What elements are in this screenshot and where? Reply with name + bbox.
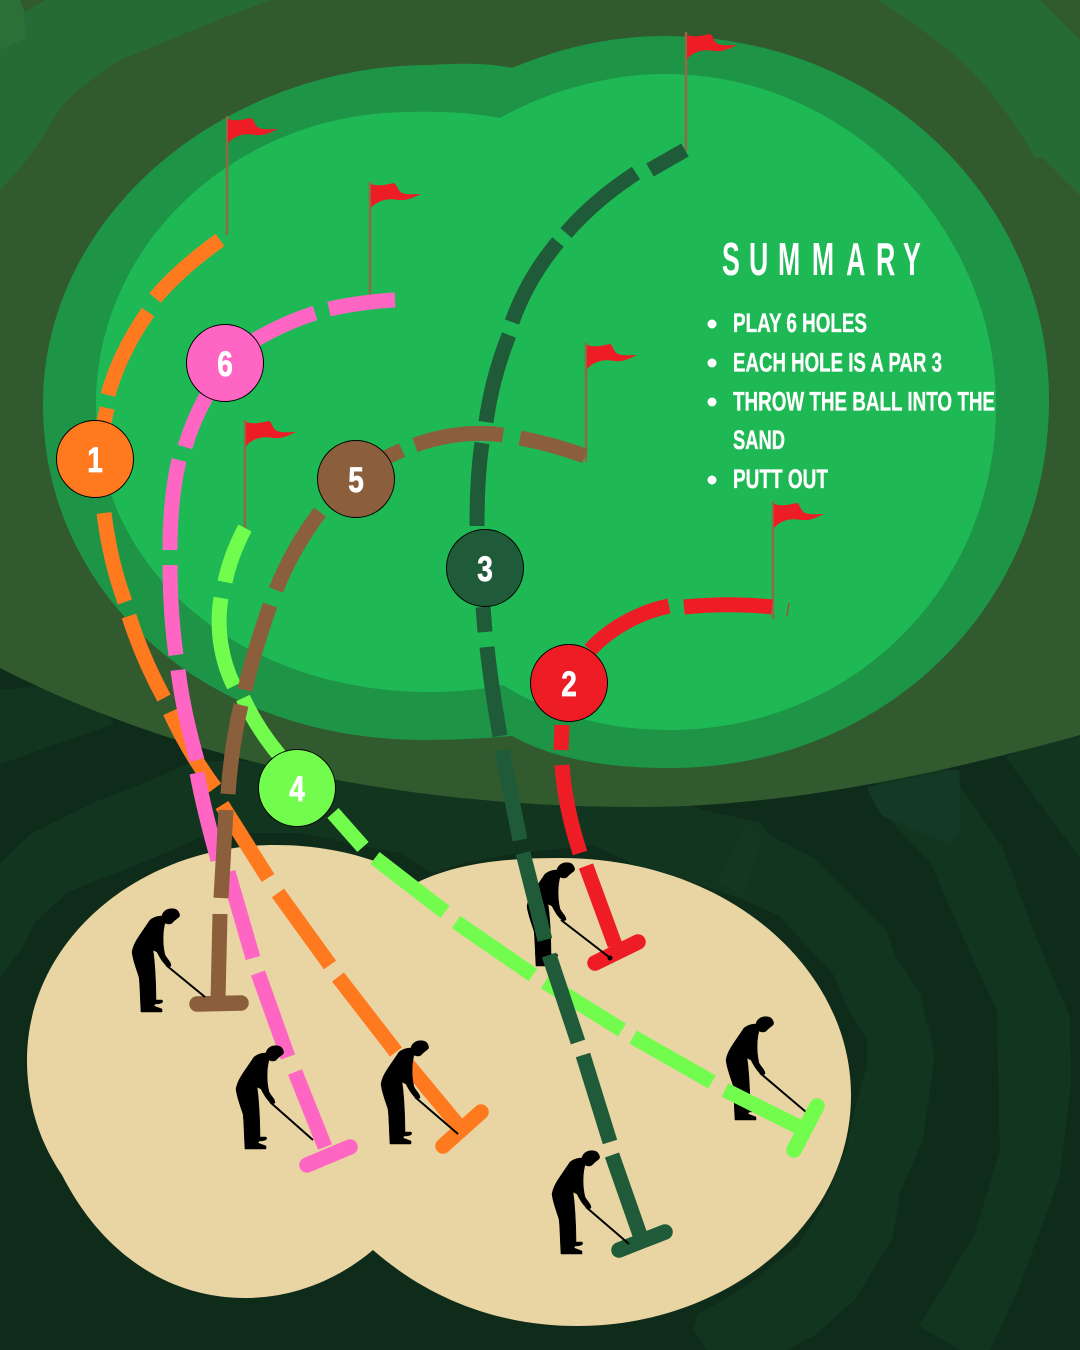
hole marker 3 xyxy=(446,530,524,606)
icon: golfer at red tee xyxy=(527,863,575,966)
hole marker 6: 6 xyxy=(217,344,233,384)
icon: flag hole 1 xyxy=(227,116,278,235)
arrow: hole 6 pink path xyxy=(170,300,395,1165)
stray tick near flag 2 xyxy=(787,603,789,616)
hole marker 1: 1 xyxy=(87,440,103,480)
hole marker 4 xyxy=(258,750,336,826)
panel: fairway outer green xyxy=(43,36,1049,768)
text block: summary list: PUTT OUT xyxy=(733,464,828,494)
hole marker 3: 3 xyxy=(477,549,493,589)
icon: flag hole 4 xyxy=(245,420,296,530)
icon: flag hole 6 xyxy=(370,182,421,296)
icon: red tee golf club xyxy=(561,920,612,960)
arrow: hole 3 dark green path xyxy=(477,150,685,1250)
hole marker 5: 5 xyxy=(348,460,364,500)
hole marker 4: 4 xyxy=(289,769,305,809)
text block: summary list: EACH HOLE IS A PAR 3 xyxy=(733,348,942,378)
arrow: hole 1 orange path xyxy=(104,240,481,1146)
arrow: hole 5 brown path xyxy=(197,433,585,1004)
icon: golfer at dark green tee xyxy=(552,1151,629,1254)
icon: golfer at green tee xyxy=(726,1017,806,1120)
arrow: hole 2 red path xyxy=(561,605,772,963)
arrow: hole 4 green path xyxy=(219,528,817,1150)
icon: golfer at brown tee xyxy=(132,909,205,1012)
hole marker 5 xyxy=(318,440,394,518)
text block: summary list: SAND xyxy=(733,425,785,455)
icon: flag hole 3 xyxy=(686,32,737,151)
text block: summary list xyxy=(708,308,995,494)
icon: golfer at orange tee xyxy=(381,1041,458,1144)
text block: summary list: PLAY 6 HOLES xyxy=(733,308,867,338)
icon: flag hole 2 xyxy=(773,502,824,619)
panel: sand tee area xyxy=(27,845,851,1326)
title: SUMMARY xyxy=(722,233,921,285)
hole marker 6 xyxy=(186,324,264,402)
panel: putting green inner xyxy=(96,74,996,730)
background: olive rough band xyxy=(0,0,1080,807)
hole marker 2: 2 xyxy=(561,664,577,704)
hole marker 1 xyxy=(56,420,134,498)
icon: golfer at pink tee xyxy=(236,1046,313,1149)
hole marker 2 xyxy=(530,644,608,722)
icon: flag hole 5 xyxy=(586,343,637,462)
